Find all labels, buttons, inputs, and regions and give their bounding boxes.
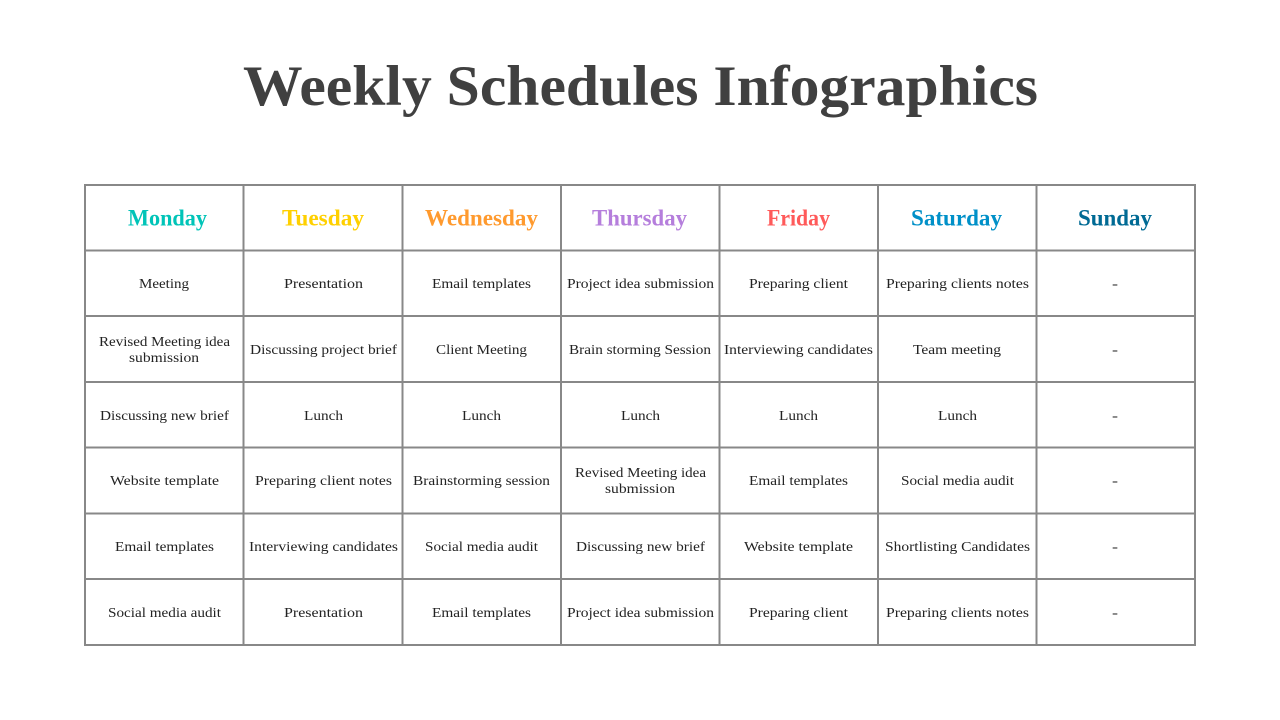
schedule row 4: Website template [110, 474, 219, 489]
schedule row 5: Email templates [115, 540, 214, 555]
schedule row 4: Email templates [749, 474, 848, 489]
schedule row 4 [110, 466, 1118, 497]
heading: Saturday: Saturday [911, 206, 1002, 230]
schedule row 3: Lunch [938, 409, 977, 424]
schedule row 4: Preparing client notes [255, 474, 392, 489]
schedule row 6: Social media audit [108, 606, 221, 621]
schedule row 2: Revised Meeting idea [99, 335, 231, 350]
header row: days of the week [128, 206, 1152, 230]
heading: Sunday: Sunday [1078, 206, 1152, 230]
title: Weekly Schedules Infographics [243, 55, 1038, 118]
schedule row 1: Email templates [432, 277, 531, 292]
schedule row 6: Email templates [432, 606, 531, 621]
heading: Thursday: Thursday [592, 206, 687, 230]
schedule row 5: Discussing new brief [576, 540, 705, 555]
heading: Wednesday: Wednesday [425, 206, 538, 230]
schedule row 2: submission [129, 351, 199, 366]
schedule row 3: - [1112, 409, 1118, 424]
schedule row 5: Website template [744, 540, 853, 555]
schedule row 1 [139, 277, 1118, 292]
schedule row 2: Team meeting [913, 343, 1001, 358]
schedule row 2: Brain storming Session [569, 343, 711, 358]
schedule row 3: Discussing new brief [100, 409, 229, 424]
schedule row 2: Interviewing candidates [724, 343, 873, 358]
schedule row 5 [115, 540, 1118, 555]
schedule row 3 [100, 409, 1118, 424]
schedule row 2: Discussing project brief [250, 343, 397, 358]
schedule row 1: Preparing client [749, 277, 848, 292]
heading: Monday: Monday [128, 206, 207, 230]
schedule row 5: Interviewing candidates [249, 540, 398, 555]
schedule row 6: Preparing clients notes [886, 606, 1029, 621]
schedule row 2 [99, 335, 1118, 366]
schedule row 1: - [1112, 277, 1118, 292]
schedule row 6: Preparing client [749, 606, 848, 621]
schedule row 3: Lunch [621, 409, 660, 424]
heading: Tuesday: Tuesday [282, 206, 364, 230]
schedule table [85, 185, 1195, 645]
schedule row 1: Meeting [139, 277, 189, 292]
schedule row 5: Shortlisting Candidates [885, 540, 1030, 555]
schedule row 5: - [1112, 540, 1118, 555]
schedule row 2: - [1112, 343, 1118, 358]
schedule row 3: Lunch [779, 409, 818, 424]
table grid [85, 185, 1195, 645]
schedule row 1: Project idea submission [567, 277, 714, 292]
schedule row 3: Lunch [304, 409, 343, 424]
schedule row 6 [108, 606, 1118, 621]
schedule row 4: Brainstorming session [413, 474, 550, 489]
schedule row 5: Social media audit [425, 540, 538, 555]
schedule row 4: Social media audit [901, 474, 1014, 489]
schedule row 1: Preparing clients notes [886, 277, 1029, 292]
schedule row 4: Revised Meeting idea [575, 466, 707, 481]
schedule row 2: Client Meeting [436, 343, 527, 358]
schedule row 6: Project idea submission [567, 606, 714, 621]
schedule row 6: Presentation [284, 606, 363, 621]
schedule row 4: - [1112, 474, 1118, 489]
heading: Friday: Friday [767, 206, 830, 230]
schedule row 1: Presentation [284, 277, 363, 292]
schedule row 6: - [1112, 606, 1118, 621]
schedule row 3: Lunch [462, 409, 501, 424]
schedule row 4: submission [605, 482, 675, 497]
